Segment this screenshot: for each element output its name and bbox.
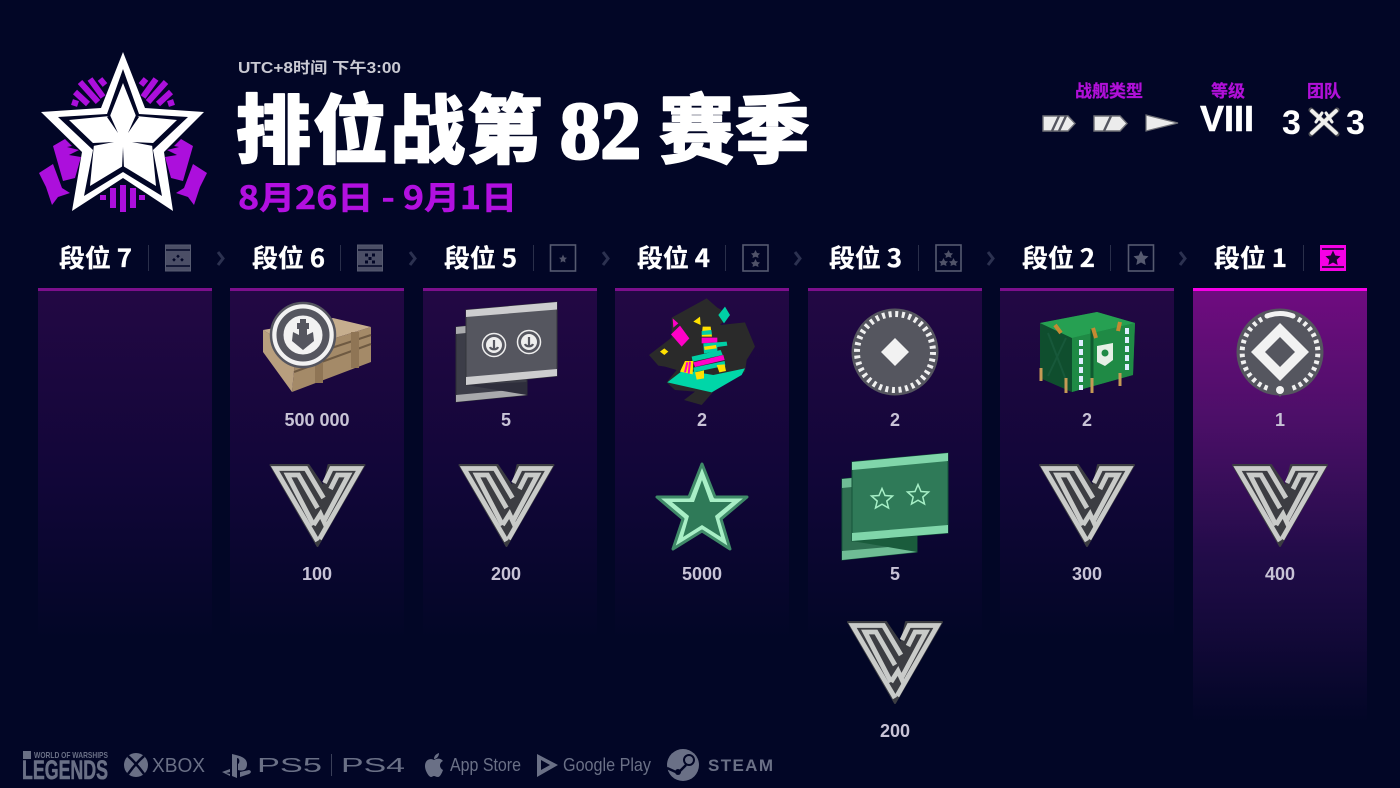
title: 82 [560, 85, 641, 176]
team size: 3 [1346, 104, 1365, 142]
logo: Google Play [537, 754, 651, 777]
rank header 1: 段位 1 [1214, 239, 1287, 275]
logo: PlayStation 5 and 4: PS5 [257, 755, 322, 777]
value: 2: 2 [890, 410, 900, 430]
date range: 8月26日 - 9月1日 [238, 173, 517, 219]
rank panel 5 [423, 288, 597, 640]
logo: World of Warships Legends [22, 750, 108, 785]
icon: crossed swords [1311, 110, 1337, 134]
rank header 7 [59, 239, 223, 275]
rank header 2 [1022, 239, 1185, 275]
title [236, 70, 810, 179]
title: 排位战第 [236, 70, 542, 179]
rank panel 4 [615, 288, 789, 640]
rank panel 2 [1000, 288, 1174, 640]
value: 5: 5 [890, 564, 900, 584]
value: 5: 5 [501, 410, 511, 430]
team size [1282, 104, 1365, 142]
team size: 3 [1282, 104, 1301, 142]
value: 5000: 5000 [682, 564, 722, 584]
logo: Xbox [124, 753, 205, 777]
rank header 1 [1214, 239, 1346, 275]
reward: laurel medal [1236, 308, 1324, 397]
logo: World of Warships Legends: LEGENDS [22, 755, 108, 785]
rank header 4 [637, 239, 800, 275]
value: 300: 300 [1072, 564, 1102, 584]
rank header 5 [444, 239, 608, 275]
reward: rank points V, rank 6 [270, 465, 364, 546]
reward: green crate [1040, 312, 1135, 393]
logo: Steam [667, 749, 773, 781]
value: 100: 100 [302, 564, 332, 584]
logo: World of Warships Legends: WORLD OF WARSHIPS [34, 750, 108, 760]
subtitle: time: UTC+8时间 下午3:00 [238, 58, 401, 77]
rank header 6 [252, 239, 415, 275]
logo: App Store [425, 753, 521, 777]
value: 2: 2 [697, 410, 707, 430]
reward: coin [852, 308, 938, 396]
icon: destroyer [1043, 116, 1075, 131]
value: 2: 2 [1082, 410, 1092, 430]
icon: cruiser [1094, 116, 1127, 131]
reward: signal cards grey [456, 302, 557, 402]
battle info: ship types, tier, team: 战舰类型 [1075, 77, 1143, 102]
rank header 6: 段位 6 [252, 239, 325, 275]
logo: Google Play: Google Play [563, 755, 651, 775]
rank panel 3 [808, 288, 982, 640]
value: 1: 1 [1275, 410, 1285, 430]
battle info: ship types, tier, team: 等级 [1211, 77, 1245, 102]
rank header 4: 段位 4 [637, 239, 710, 275]
rank panel 7 [38, 288, 212, 640]
reward: green star [657, 464, 747, 549]
tier: VIII [1200, 98, 1254, 139]
logo: PlayStation 5 and 4 [222, 754, 405, 778]
rank header 5: 段位 5 [444, 239, 517, 275]
reward: pinata [649, 298, 755, 405]
value: 200: 200 [880, 721, 910, 741]
title: 赛季 [659, 70, 810, 179]
logo: star emblem [39, 52, 207, 212]
logo: Steam: STEAM [708, 756, 773, 775]
reward: rank points V, rank 3 [848, 622, 942, 703]
logo: PlayStation 5 and 4: PS4 [341, 755, 405, 777]
rank panel 6 [230, 288, 404, 640]
value: 400: 400 [1265, 564, 1295, 584]
battle info: ship types, tier, team [1043, 77, 1365, 142]
reward: rank points V, rank 5 [460, 465, 554, 546]
rank header 3 [829, 239, 993, 275]
logo: App Store: App Store [450, 755, 521, 775]
reward: rank points V, rank 1 [1233, 465, 1327, 546]
footer: platform logos [22, 749, 773, 785]
reward: signal cards green [842, 453, 948, 560]
logo: Xbox: XBOX [152, 755, 205, 777]
rank header 7: 段位 7 [59, 239, 132, 275]
rank panel 1 [1193, 288, 1367, 723]
icon: battleship [1146, 115, 1178, 131]
battle info: ship types, tier, team: 团队 [1307, 77, 1341, 102]
rank header 2: 段位 2 [1022, 239, 1095, 275]
value: 500 000: 500 000 [284, 410, 350, 430]
value: 200: 200 [491, 564, 521, 584]
reward: rank points V, rank 2 [1040, 465, 1134, 546]
rank header 3: 段位 3 [829, 239, 902, 275]
reward: credits crate [263, 303, 371, 392]
